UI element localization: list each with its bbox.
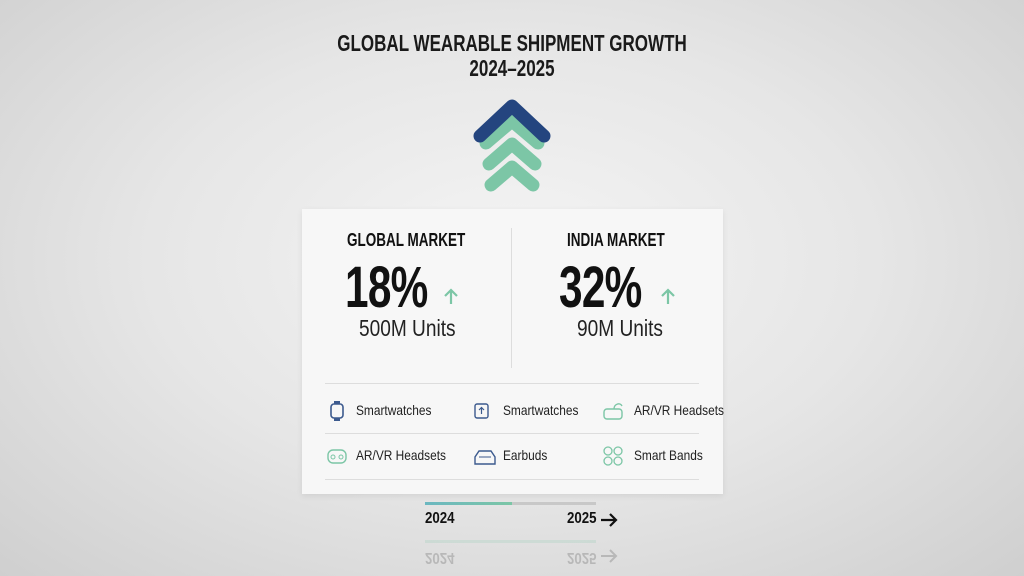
item: smart bands	[603, 446, 703, 466]
item: smart bands: Smart Bands	[634, 447, 703, 463]
stat: 32%: 32%	[559, 255, 642, 320]
heading: india: INDIA MARKET	[567, 230, 665, 250]
panel: market card	[302, 209, 723, 494]
item: ar/vr headsets	[603, 402, 724, 420]
item: smartwatches	[330, 401, 431, 421]
label 2025: 2025	[567, 510, 597, 527]
item: ar/vr headsets 2: AR/VR Headsets	[356, 447, 446, 463]
stat: 18%: 18%	[345, 255, 428, 320]
title: 2024–2025	[469, 55, 555, 81]
arrow	[601, 513, 618, 527]
item: smartwatches: Smartwatches	[356, 402, 431, 418]
category list	[327, 401, 724, 466]
divider	[511, 228, 512, 368]
reflection: 2024	[425, 549, 455, 566]
units: 90M Units	[577, 315, 663, 341]
icon: growth chevrons	[474, 100, 550, 192]
progress bar	[425, 502, 596, 505]
reflection	[425, 540, 618, 566]
label 2024: 2024	[425, 510, 455, 527]
item: earbuds	[474, 447, 547, 465]
units: 500M Units	[359, 315, 456, 341]
title	[337, 30, 687, 81]
item: smartwatches 2	[474, 402, 578, 419]
icon: up arrow	[661, 288, 675, 304]
reflection: 2025	[567, 549, 597, 566]
item: earbuds: Earbuds	[503, 447, 547, 463]
item: ar/vr headsets: AR/VR Headsets	[634, 402, 724, 418]
heading: global: GLOBAL MARKET	[347, 230, 465, 250]
panel: india market	[559, 230, 675, 341]
item: smartwatches 2: Smartwatches	[503, 402, 578, 418]
panel: global market	[345, 230, 466, 341]
icon: up arrow	[444, 288, 458, 304]
title: GLOBAL WEARABLE SHIPMENT GROWTH	[337, 30, 687, 56]
timeline	[425, 502, 618, 527]
